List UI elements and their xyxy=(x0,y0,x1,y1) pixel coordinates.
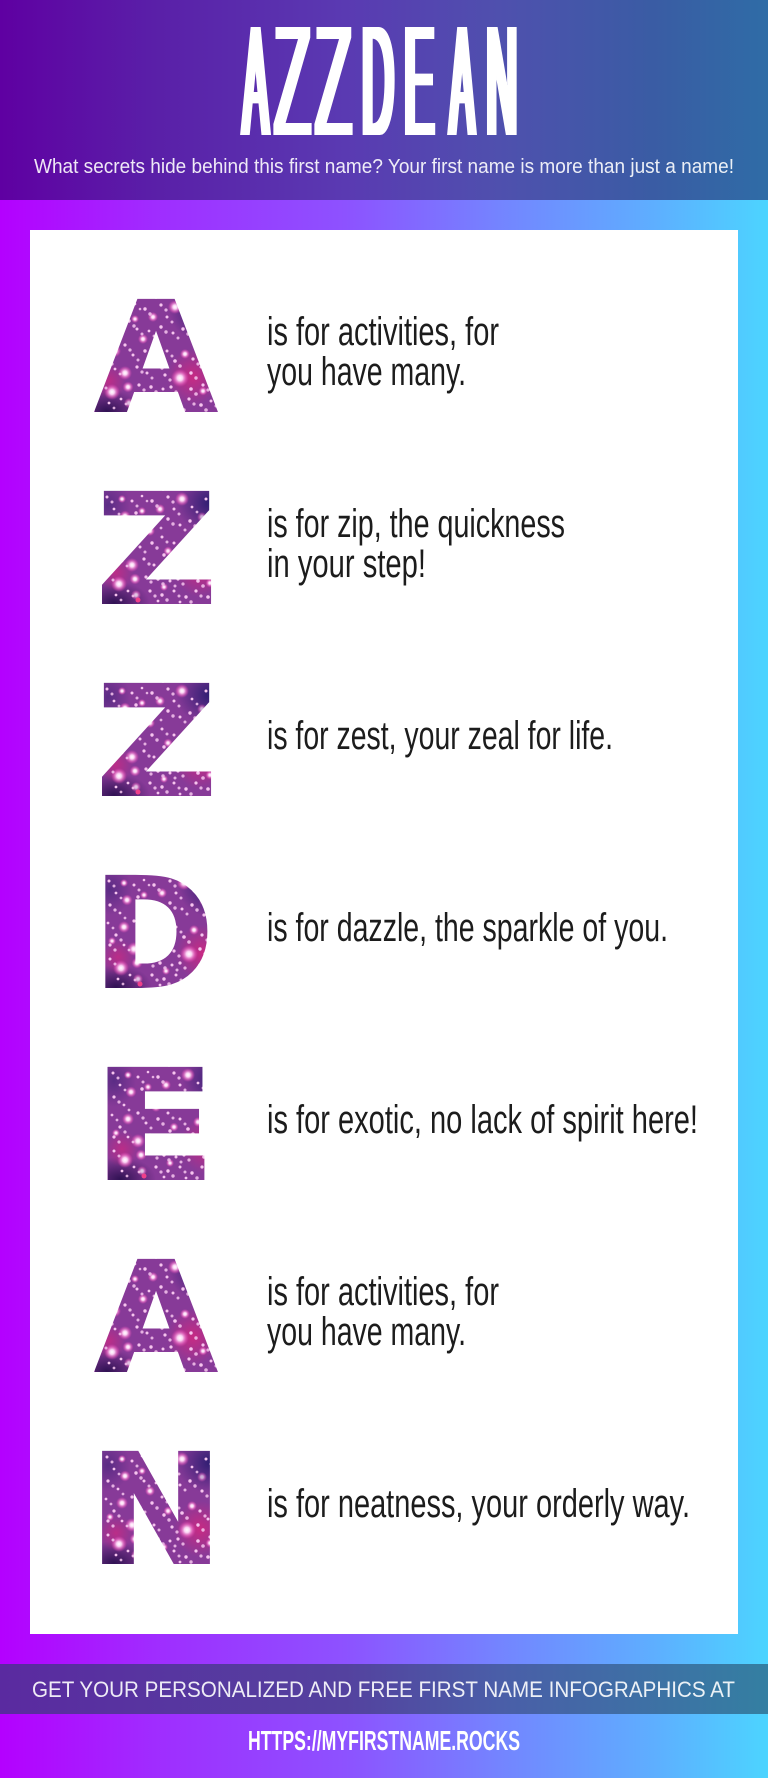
title: Azzdean: E xyxy=(404,0,434,169)
row D xyxy=(94,846,668,1022)
letter Z second: Z xyxy=(96,654,217,830)
text for second A xyxy=(267,1270,499,1354)
letter Z: Z xyxy=(96,462,217,638)
panel: white letter list xyxy=(30,230,738,1634)
row N xyxy=(89,1422,690,1598)
text for second A: you have many. xyxy=(267,1310,466,1354)
row Z xyxy=(96,462,565,638)
text for Z xyxy=(267,502,565,586)
letter A second: A xyxy=(96,1230,217,1406)
text for Z: is for zip, the quickness xyxy=(267,502,565,546)
text for second A: is for activities, for xyxy=(267,1270,499,1314)
text for A: you have many. xyxy=(267,350,466,394)
letter E: E xyxy=(93,1038,216,1214)
text for Z: in your step! xyxy=(267,542,426,586)
text for A xyxy=(267,310,499,394)
row A xyxy=(96,270,499,446)
title: Azzdean xyxy=(243,0,517,169)
text for A: is for activities, for xyxy=(267,310,499,354)
footer url: HTTPS://MYFIRSTNAME.ROCKS xyxy=(248,1725,520,1756)
row Z second xyxy=(96,654,613,830)
letter N: N xyxy=(89,1422,223,1598)
header band xyxy=(0,0,768,200)
row E xyxy=(93,1038,698,1214)
subtitle: What secrets hide behind this first name? Your first name is more than just a name! xyxy=(34,155,734,178)
footer band xyxy=(0,1664,768,1714)
row A second xyxy=(96,1230,499,1406)
letter D: D xyxy=(94,846,214,1022)
text for second Z: is for zest, your zeal for life. xyxy=(267,714,613,758)
letter A: A xyxy=(96,270,217,446)
